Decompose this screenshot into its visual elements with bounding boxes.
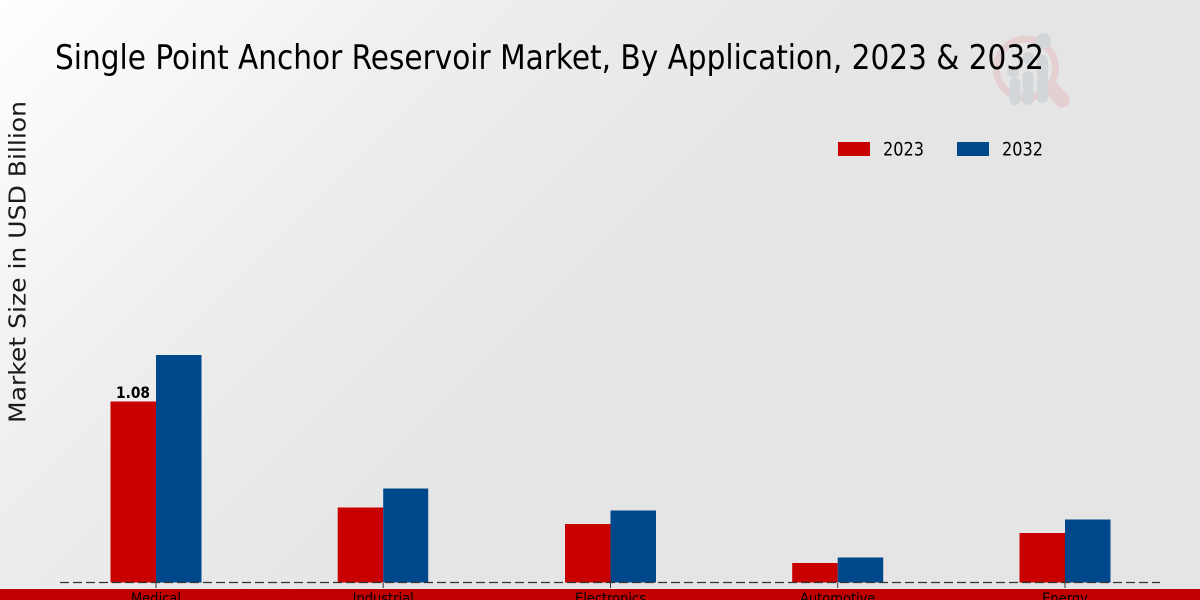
axis ticks	[156, 583, 1065, 588]
x axis baseline	[60, 582, 1160, 584]
y axis title: Market Size in USD Billion	[6, 101, 32, 423]
bars: Electronics	[565, 510, 656, 582]
legend: 2032	[1002, 138, 1043, 160]
footer band	[0, 589, 1200, 600]
title: Single Point Anchor Reservoir Market, By Application, 2023 & 2032	[55, 38, 1044, 78]
icon: watermark logo	[996, 33, 1062, 105]
bars: Automotive	[792, 558, 883, 582]
category labels	[131, 591, 1088, 600]
value label: 1.08	[116, 383, 150, 402]
bar chart	[60, 355, 1160, 588]
bars: Medical	[110, 355, 202, 582]
bars: Energy	[1020, 520, 1110, 582]
legend: 2023	[883, 138, 924, 160]
legend	[838, 138, 1043, 160]
bars: Industrial	[338, 488, 428, 582]
